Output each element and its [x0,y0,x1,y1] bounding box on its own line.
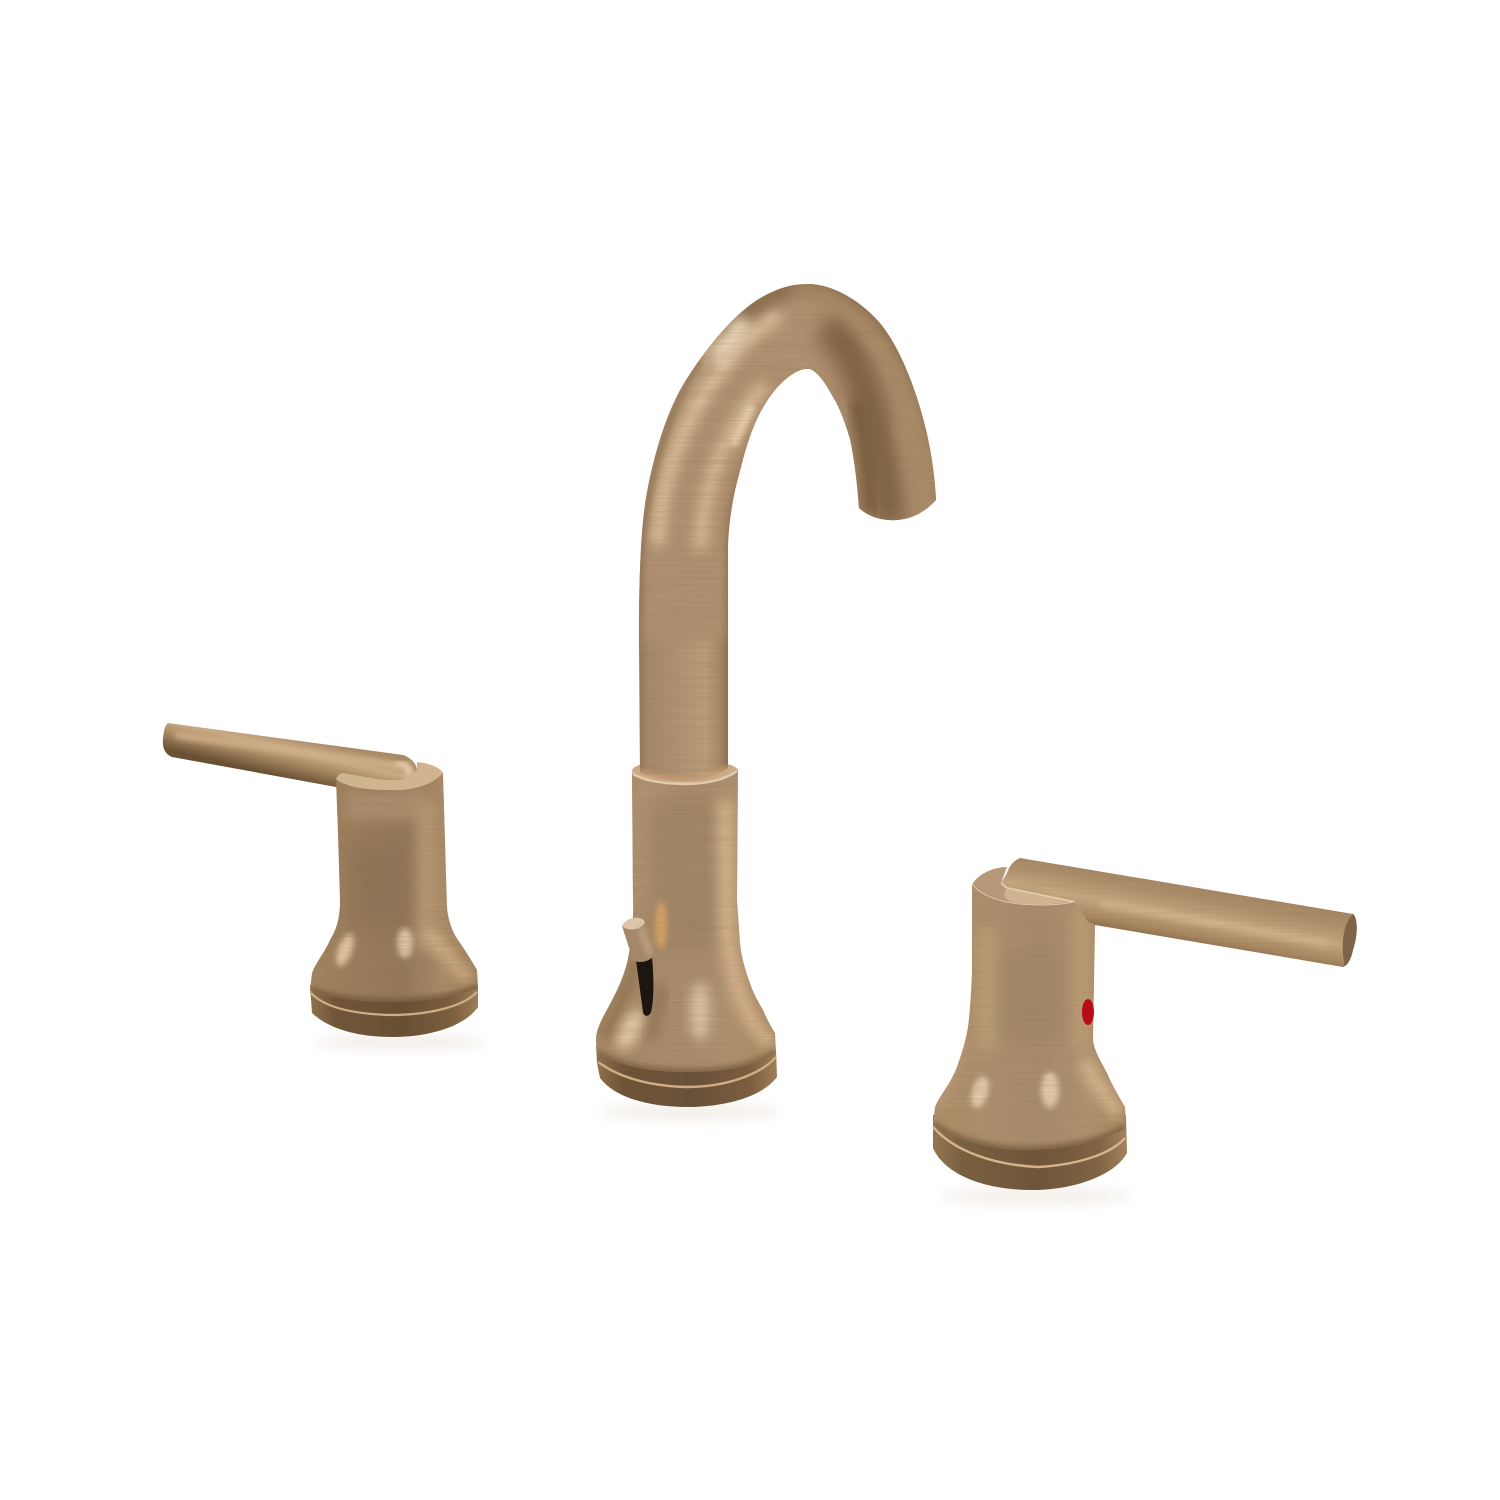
right handle [925,850,1365,1190]
collar back rim [632,759,738,783]
hot indicator: red dot [1082,999,1094,1025]
left handle body [310,773,478,1002]
spout shading: dark descending section [825,325,890,525]
body shading [632,784,653,891]
left handle top cap [336,762,443,790]
left handle [155,715,485,1037]
pop-up drain rod [622,918,654,1016]
spout base plate [596,1045,777,1107]
left handle base [310,985,478,1037]
right handle lever [1001,858,1357,967]
left handle lever [162,723,417,787]
floor shadows [315,1034,1130,1204]
collar and bell body of spout [596,770,776,1072]
right handle base [933,1115,1127,1190]
right handle top recess [972,867,1075,906]
right handle body [933,885,1126,1150]
spout: gooseneck tube [639,284,936,781]
collar front rim highlight [633,771,737,784]
illustration: three-piece widespread faucet [162,284,1357,1206]
spout highlights [658,315,780,545]
